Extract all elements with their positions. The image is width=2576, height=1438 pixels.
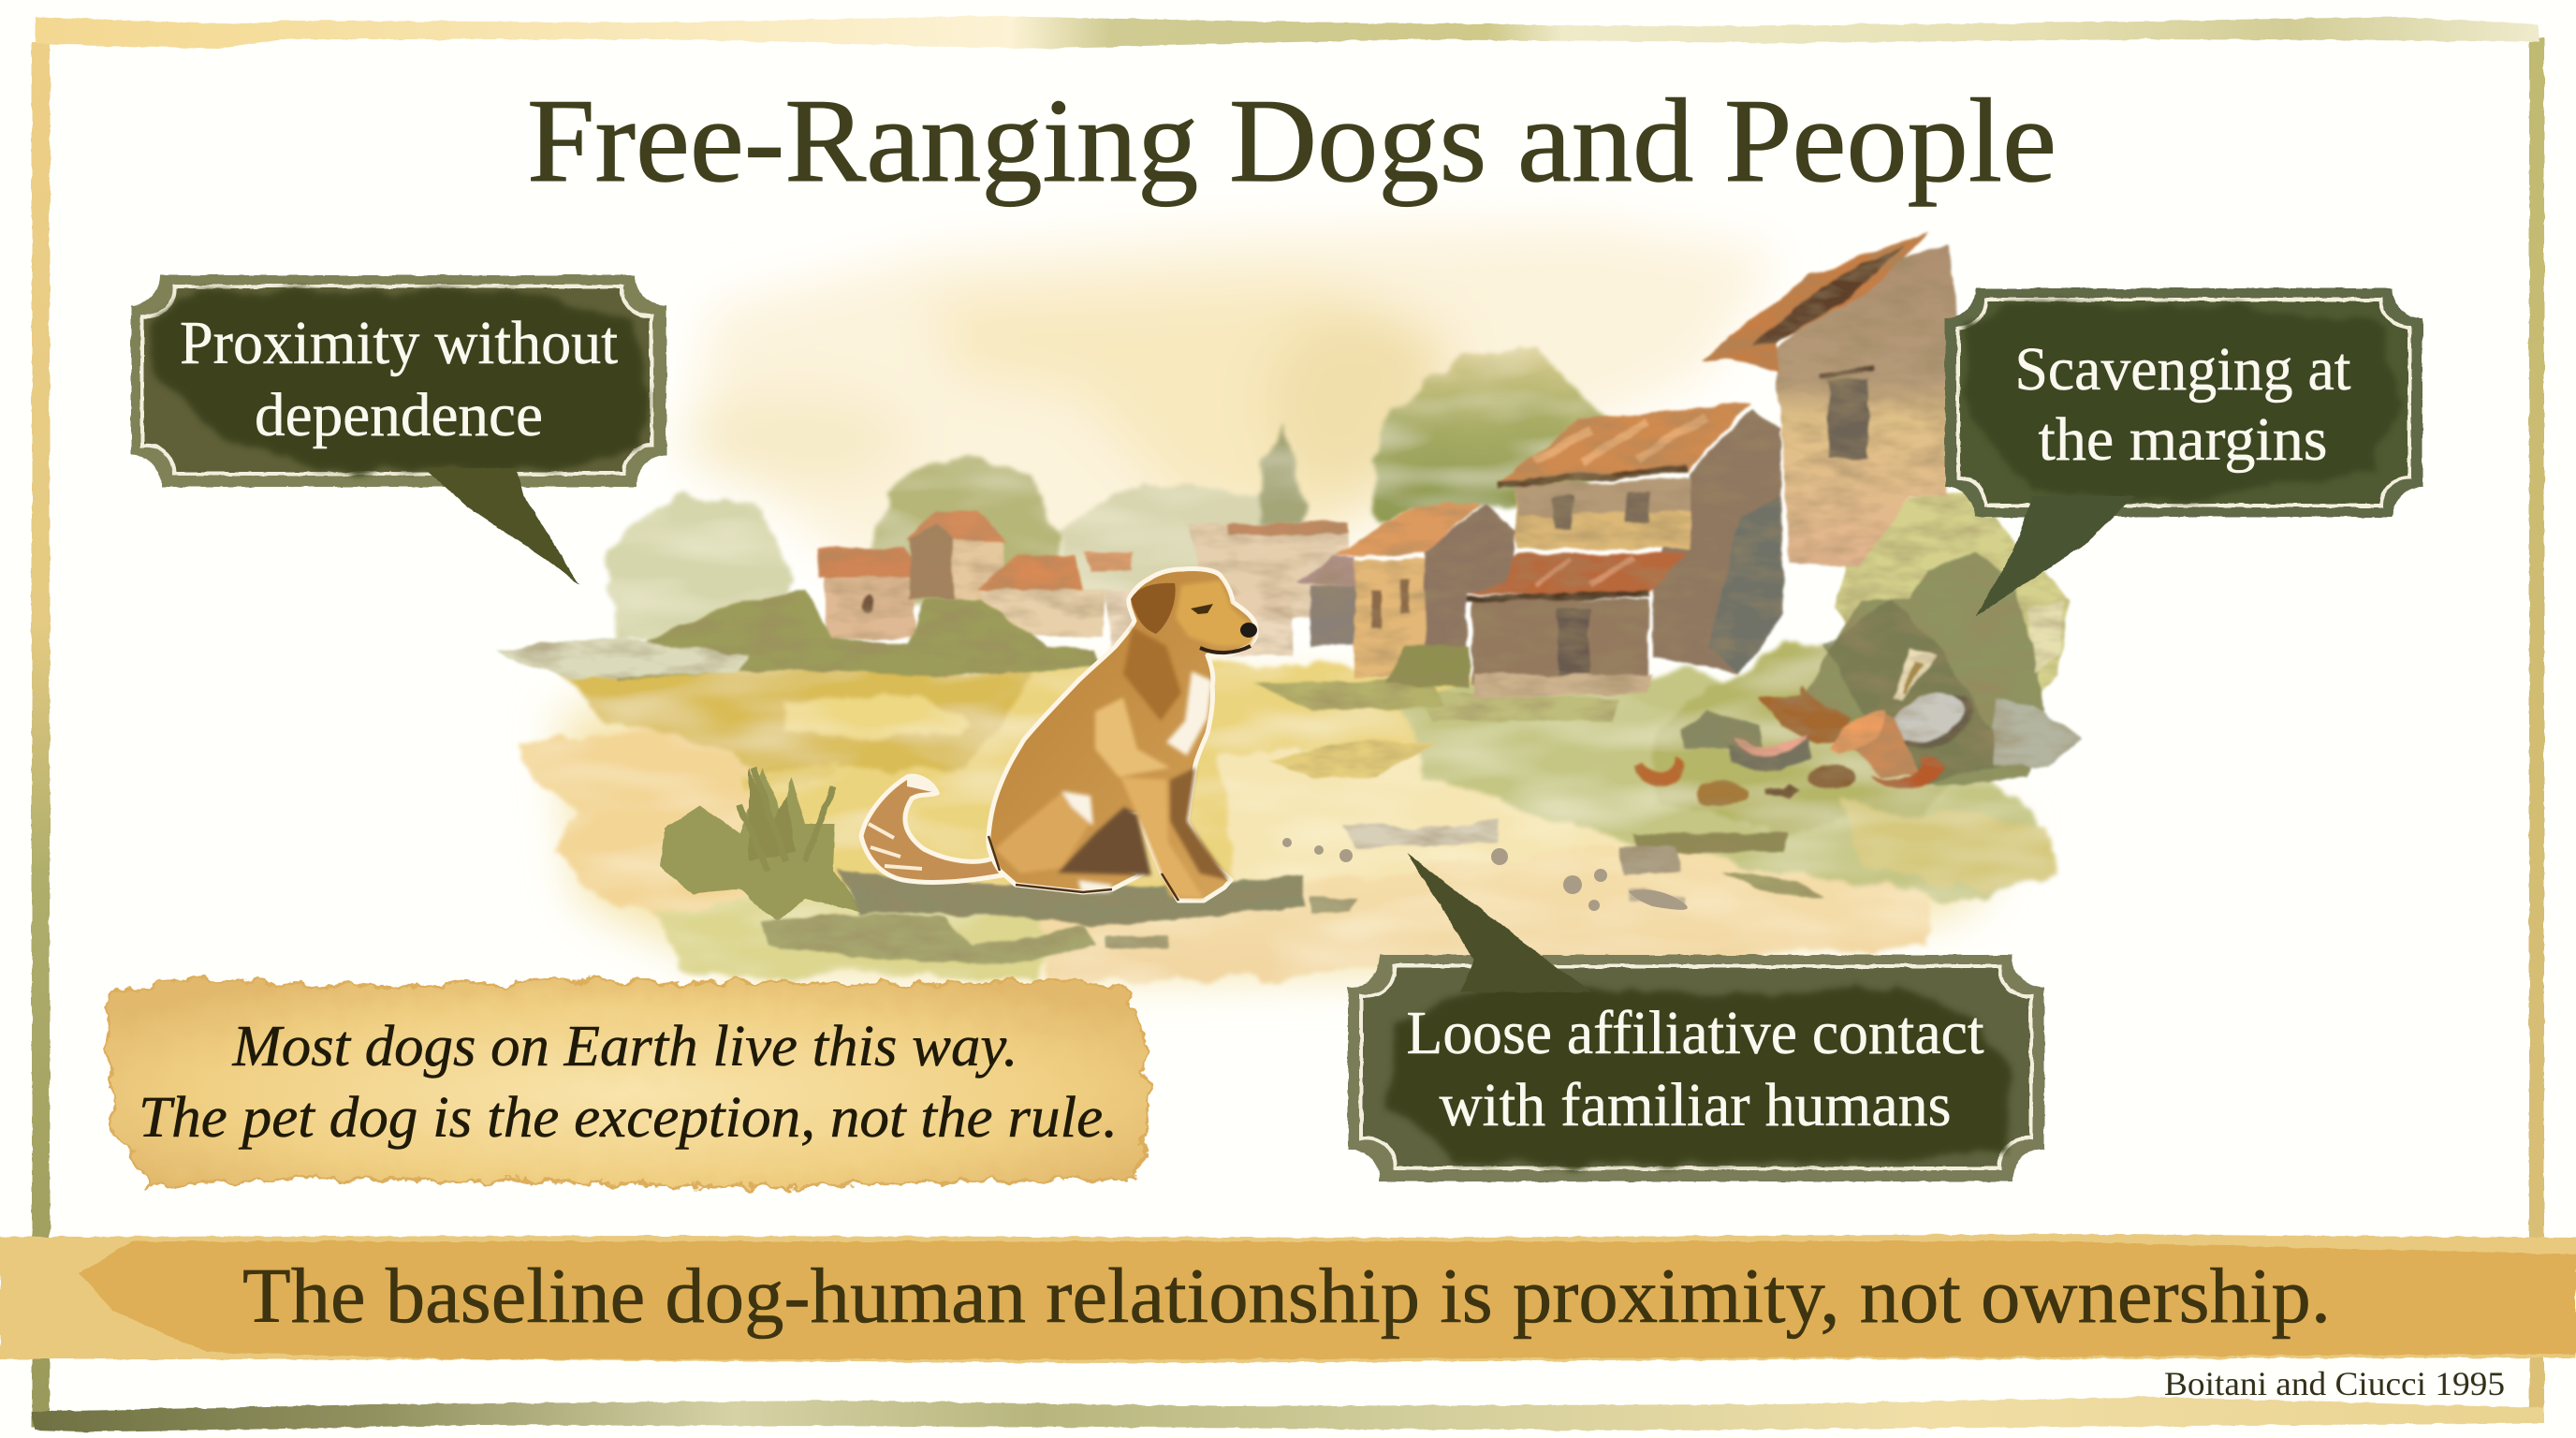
callout text: with familiar humans bbox=[1440, 1071, 1951, 1139]
near hedge bbox=[496, 590, 1100, 679]
dog ground shadow bbox=[758, 871, 1357, 964]
callout plaque bbox=[1348, 955, 2044, 1181]
note: parchment text panel bbox=[109, 978, 1149, 1187]
callout dark wash bbox=[1389, 983, 2012, 1165]
note text: Most dogs on Earth live this way. bbox=[231, 1015, 1017, 1078]
dog body bbox=[988, 568, 1256, 901]
callout dark wash bbox=[152, 290, 648, 470]
crescents and nuts bbox=[1872, 756, 1943, 788]
callout: loose affiliative contact bbox=[1348, 853, 2044, 1181]
callout plaque bbox=[131, 275, 666, 487]
dog face bbox=[988, 583, 1257, 901]
callout plaque bbox=[1945, 288, 2422, 517]
callout tail bbox=[423, 468, 579, 585]
parchment shape bbox=[109, 978, 1149, 1187]
sky wash bbox=[683, 225, 1778, 580]
tall rear building bbox=[1702, 232, 1958, 567]
dog tail bbox=[861, 776, 1002, 883]
callout dark wash bbox=[1964, 304, 2396, 500]
callout: scavenging at the margins bbox=[1945, 288, 2422, 616]
citation: Boitani and Ciucci 1995 bbox=[2164, 1365, 2505, 1402]
bone stick bbox=[1893, 648, 1938, 700]
side wall building bbox=[1296, 403, 1783, 697]
callout text: Loose affiliative contact bbox=[1406, 999, 1984, 1067]
distant village left bbox=[818, 512, 1348, 655]
houses right bbox=[1296, 232, 1958, 697]
banner text: The baseline dog-human relationship is proximity, not ownership. bbox=[242, 1253, 2331, 1340]
watercolour scene bbox=[496, 225, 2083, 983]
title: Free-Ranging Dogs and People bbox=[527, 74, 2056, 207]
ground speckles bbox=[1282, 838, 1688, 911]
distant hills bbox=[608, 421, 1310, 646]
ground washes bbox=[524, 637, 2059, 983]
dog shading bbox=[995, 580, 1256, 899]
callout text: the margins bbox=[2039, 405, 2327, 474]
callout text: Proximity without bbox=[180, 309, 618, 377]
grass tuft bbox=[660, 768, 866, 922]
brown peel bbox=[1757, 686, 1852, 744]
callout tail bbox=[1976, 496, 2134, 616]
callout: proximity without dependence bbox=[131, 275, 666, 585]
background tree bbox=[1367, 346, 1629, 515]
plate bbox=[1885, 682, 1982, 759]
banner wash bbox=[0, 1234, 2576, 1363]
icon: sitting dog bbox=[861, 568, 1257, 901]
soft ground base bbox=[562, 683, 2012, 974]
note text: The pet dog is the exception, not the rule. bbox=[139, 1086, 1118, 1150]
callout tail bbox=[1407, 853, 1591, 992]
callout text: dependence bbox=[255, 381, 543, 449]
orange half bbox=[1858, 713, 1919, 777]
bottom takeaway banner bbox=[0, 1234, 2576, 1363]
right shrubs bbox=[1254, 492, 2083, 906]
callout text: Scavenging at bbox=[2014, 335, 2351, 404]
food scraps pile bbox=[1633, 648, 1982, 804]
melon bowl bbox=[1729, 738, 1809, 770]
